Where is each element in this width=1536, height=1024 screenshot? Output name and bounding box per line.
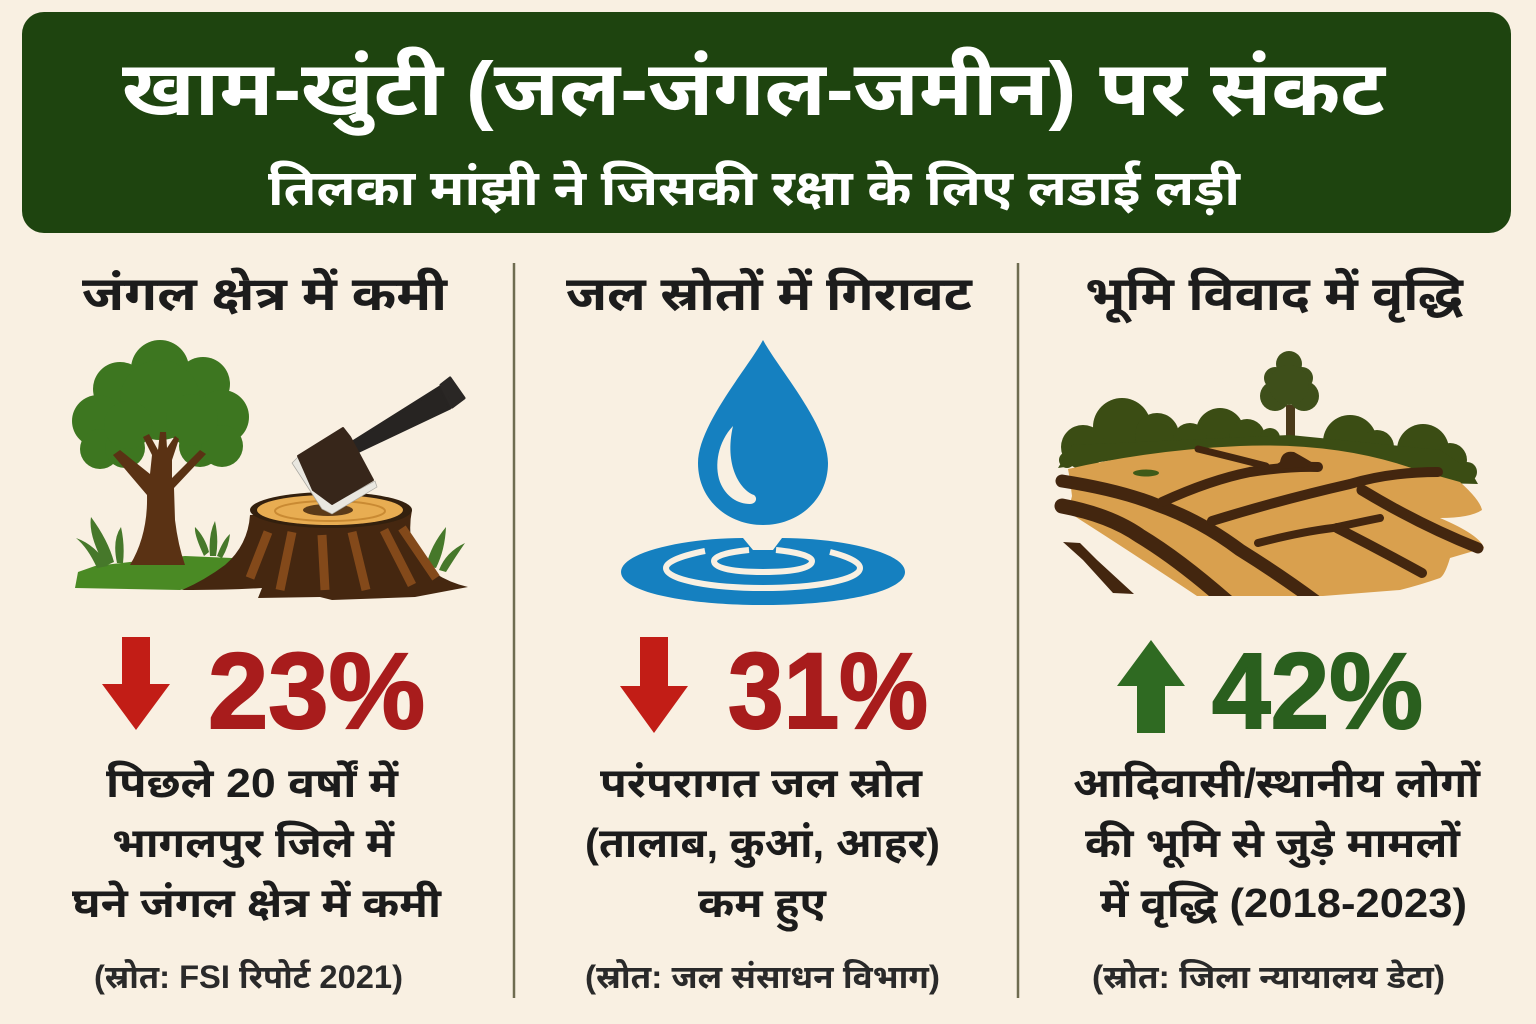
down arrow <box>620 637 688 733</box>
icon: land plots <box>1058 351 1484 606</box>
title: खाम-खुंटी (जल-जंगल-जमीन) पर संकट <box>122 47 1386 136</box>
forest description: पिछले 20 वर्षों में <box>106 759 399 806</box>
water description: कम हुए <box>698 880 827 932</box>
icon: water drop and ripples <box>621 340 905 605</box>
stat 23%: 23% <box>208 630 425 751</box>
water description: परंपरागत जल स्रोत <box>600 760 924 806</box>
land description: की भूमि से जुड़े मामलों <box>1085 819 1461 869</box>
land source: (स्रोत: जिला न्यायालय डेटा) <box>1092 959 1445 995</box>
panel: water <box>566 267 973 995</box>
forest description: घने जंगल क्षेत्र में कमी <box>72 879 442 926</box>
up arrow <box>1117 640 1185 733</box>
icon: tree and axe in stump <box>72 340 468 600</box>
header banner <box>22 12 1511 233</box>
water description <box>585 760 940 932</box>
water description: (तालाब, कुआं, आहर) <box>585 820 940 868</box>
land description: आदिवासी/स्थानीय लोगों <box>1073 760 1481 806</box>
forest description <box>72 759 442 926</box>
land description <box>1073 760 1481 929</box>
panel: forest <box>72 267 468 995</box>
down arrow <box>102 637 170 730</box>
water source: (स्रोत: जल संसाधन विभाग) <box>585 959 940 995</box>
forest description: भागलपुर जिले में <box>112 819 395 868</box>
subtitle: तिलका मांझी ने जिसकी रक्षा के लिए लडाई लड़ी <box>268 160 1241 216</box>
land description: में वृद्धि (2018-2023) <box>1100 880 1467 929</box>
land heading: भूमि विवाद में वृद्धि <box>1085 267 1465 324</box>
stat 31%: 31% <box>728 630 928 751</box>
water heading: जल स्रोतों में गिरावट <box>566 267 973 320</box>
stat 42%: 42% <box>1212 630 1423 751</box>
panel: land <box>1058 267 1484 995</box>
forest heading: जंगल क्षेत्र में कमी <box>82 267 448 320</box>
forest source: (स्रोत: FSI रिपोर्ट 2021) <box>94 959 403 995</box>
